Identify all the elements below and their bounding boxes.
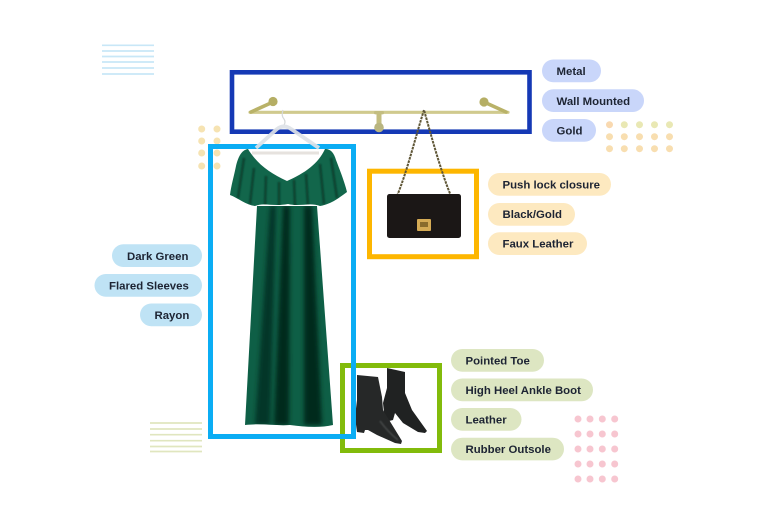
tags: rail [542, 60, 644, 142]
tag: High Heel Ankle Boot [451, 378, 593, 401]
tag: Leather: Leather [466, 414, 507, 426]
tag: Leather [451, 408, 522, 431]
tag: Faux Leather: Faux Leather [502, 239, 574, 251]
tag: Dark Green: Dark Green [127, 251, 188, 263]
tag: Pointed Toe: Pointed Toe [466, 356, 530, 368]
highlight box: boots [342, 366, 440, 450]
tag: Pointed Toe [451, 349, 544, 372]
hanger [252, 110, 319, 153]
tag: Flared Sleeves: Flared Sleeves [109, 280, 189, 292]
tag: Wall Mounted: Wall Mounted [556, 96, 630, 108]
tag: Push lock closure: Push lock closure [502, 180, 600, 192]
ankle boots [355, 368, 427, 444]
tags: dress [94, 244, 202, 326]
decorative lines: bottom left [150, 423, 202, 452]
highlight box: dress [210, 146, 354, 436]
dress skirt [245, 206, 333, 427]
decorative dots: right of rail tags [606, 121, 673, 152]
left boot [355, 375, 402, 444]
clothing rail [250, 97, 508, 132]
tag: Metal: Metal [556, 66, 586, 78]
dress skirt folds [255, 206, 322, 425]
highlight box overlap: dress frame over boots frame [340, 360, 354, 436]
highlight box: rail [232, 72, 530, 132]
dress ruffle and sleeves [230, 149, 347, 206]
decorative lines: top left [102, 45, 154, 74]
tag: High Heel Ankle Boot: High Heel Ankle Boot [466, 385, 581, 397]
handbag [387, 110, 461, 238]
tag: Black/Gold: Black/Gold [502, 209, 562, 221]
tag: Gold: Gold [556, 126, 582, 138]
tag: Rubber Outsole: Rubber Outsole [466, 444, 551, 456]
highlight box: bag [370, 171, 476, 257]
decorative dots: pink [574, 416, 618, 482]
right boot [383, 368, 427, 433]
tag: Rubber Outsole [451, 438, 564, 460]
tag: Rayon: Rayon [154, 310, 189, 322]
boot highlight [380, 421, 398, 440]
tags: boots [451, 349, 593, 460]
tags: bag [488, 173, 611, 255]
decorative dots: left of dress [198, 126, 220, 170]
dress [230, 149, 347, 427]
